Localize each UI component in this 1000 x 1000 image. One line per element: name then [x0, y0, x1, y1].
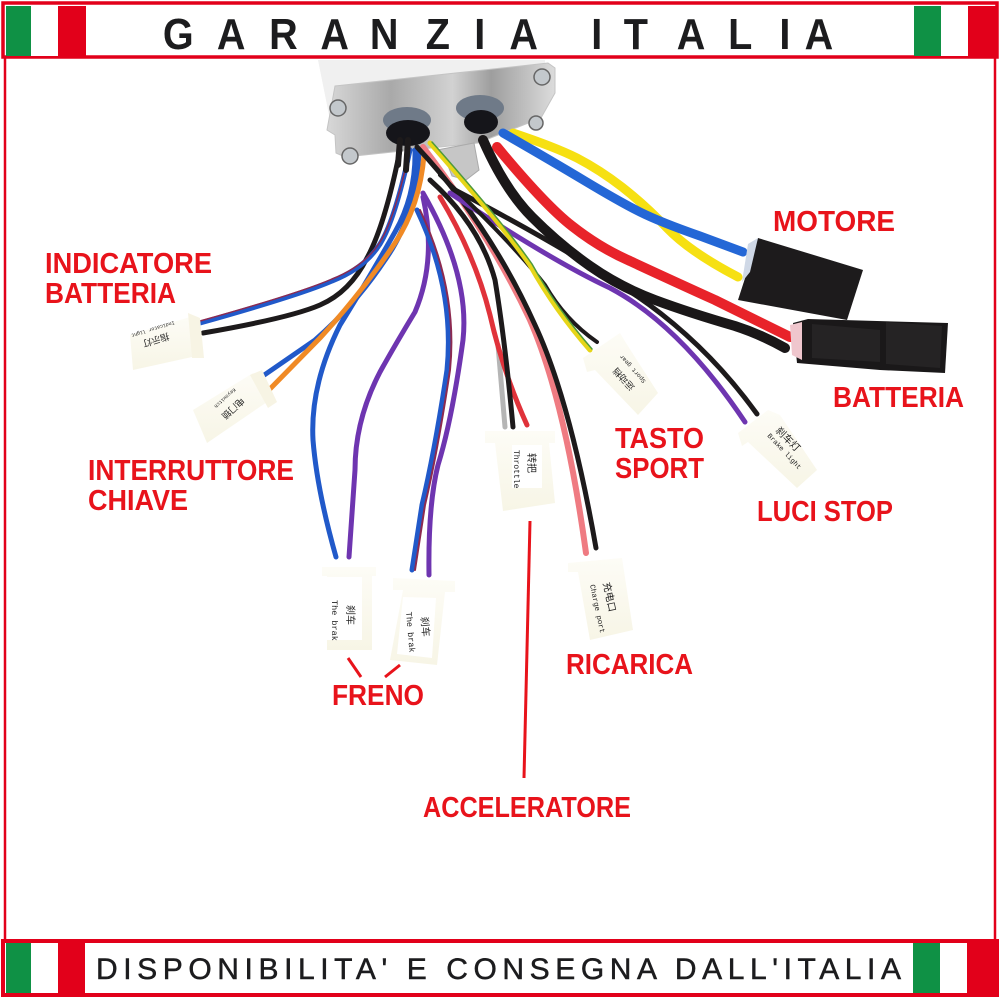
bottom banner — [3, 941, 997, 995]
connector: throttle — [485, 431, 555, 511]
connector: brake one — [322, 567, 376, 650]
label: interruttore chiave: CHIAVE — [88, 485, 188, 517]
connector: sport switch: 运动档 — [609, 365, 637, 394]
flag right — [914, 6, 996, 56]
controller unit — [318, 60, 555, 180]
thin connector wires — [200, 140, 757, 575]
label: batteria: BATTERIA — [833, 382, 964, 414]
connector: charge port: Charge port — [587, 584, 605, 634]
left grommet — [383, 107, 431, 146]
connector: indicator light: Indicator light — [130, 319, 175, 338]
label: motore: MOTORE — [773, 206, 895, 238]
yellow motor wire — [513, 133, 738, 277]
label: tasto sport: SPORT — [615, 453, 704, 485]
throttle wires — [430, 180, 527, 427]
connector: charge port: 充电口 — [600, 581, 621, 613]
connector: throttle: 转把 — [525, 453, 540, 473]
bolts — [330, 69, 550, 164]
mounting bracket — [437, 143, 479, 180]
connector: brake light: Brake light — [765, 433, 802, 472]
label: ricarica: RICARICA — [566, 649, 693, 681]
connector: brake light: 刹车灯 — [773, 423, 805, 454]
connector: brake two: The brak — [403, 611, 417, 653]
connector: brake light — [738, 410, 817, 488]
key switch wires — [257, 150, 424, 392]
banner background — [3, 3, 997, 57]
arrow: throttle pointer — [524, 521, 530, 778]
connector: key switch: Keyswitch — [213, 387, 237, 409]
mounting plate — [327, 63, 555, 157]
connector: indicator light: 指示灯 — [141, 330, 171, 350]
label: interruttore chiave: INTERRUTTORE — [88, 455, 294, 487]
connector: brake one: 刹车 — [344, 605, 359, 625]
battery connector — [790, 319, 948, 373]
footer flag left — [6, 943, 85, 993]
connector: key switch — [193, 370, 277, 443]
controller body — [318, 60, 545, 130]
brake light wires — [450, 190, 757, 422]
label: indicatore batteria: INDICATORE — [45, 248, 212, 280]
right grommet — [456, 95, 504, 134]
red battery wire — [497, 147, 790, 337]
charge port wires — [417, 147, 596, 553]
wire bundle at left grommet — [398, 140, 408, 170]
label: indicatore batteria: BATTERIA — [45, 278, 176, 310]
connector: brake two: 刹车 — [418, 616, 435, 637]
indicator wires — [200, 148, 410, 333]
connector: key switch: 电门锁 — [219, 395, 248, 423]
label: luci stop: LUCI STOP — [757, 496, 893, 528]
connector: throttle: Throttle — [511, 450, 520, 489]
brake one wires — [313, 150, 428, 557]
footer background — [3, 941, 997, 995]
thick motor and battery wires — [497, 133, 790, 337]
flag left — [6, 6, 86, 56]
connector: sport switch — [583, 333, 658, 415]
label: acceleratore: ACCELERATORE — [423, 792, 631, 824]
connector: charge port — [568, 558, 633, 640]
arrow: brake pointers — [348, 658, 400, 677]
label: tasto sport: TASTO — [615, 423, 704, 455]
banner title: GARANZIAITALIA — [163, 9, 833, 58]
motor connector — [738, 238, 863, 320]
connector: sport switch: Sport gear — [618, 353, 647, 384]
footer flag right — [913, 943, 996, 993]
top banner — [3, 3, 997, 58]
label: freno: FRENO — [332, 680, 424, 712]
connector: brake one: The brak — [329, 600, 339, 641]
blue motor wire — [503, 133, 743, 252]
connector: brake two — [390, 578, 455, 665]
brake two wires — [412, 193, 464, 575]
sport switch wires — [430, 142, 597, 350]
black battery wire — [483, 140, 785, 348]
footer text: DISPONIBILITA' E CONSEGNA DALL'ITALIA — [96, 953, 901, 986]
connector: indicator light — [130, 313, 204, 370]
